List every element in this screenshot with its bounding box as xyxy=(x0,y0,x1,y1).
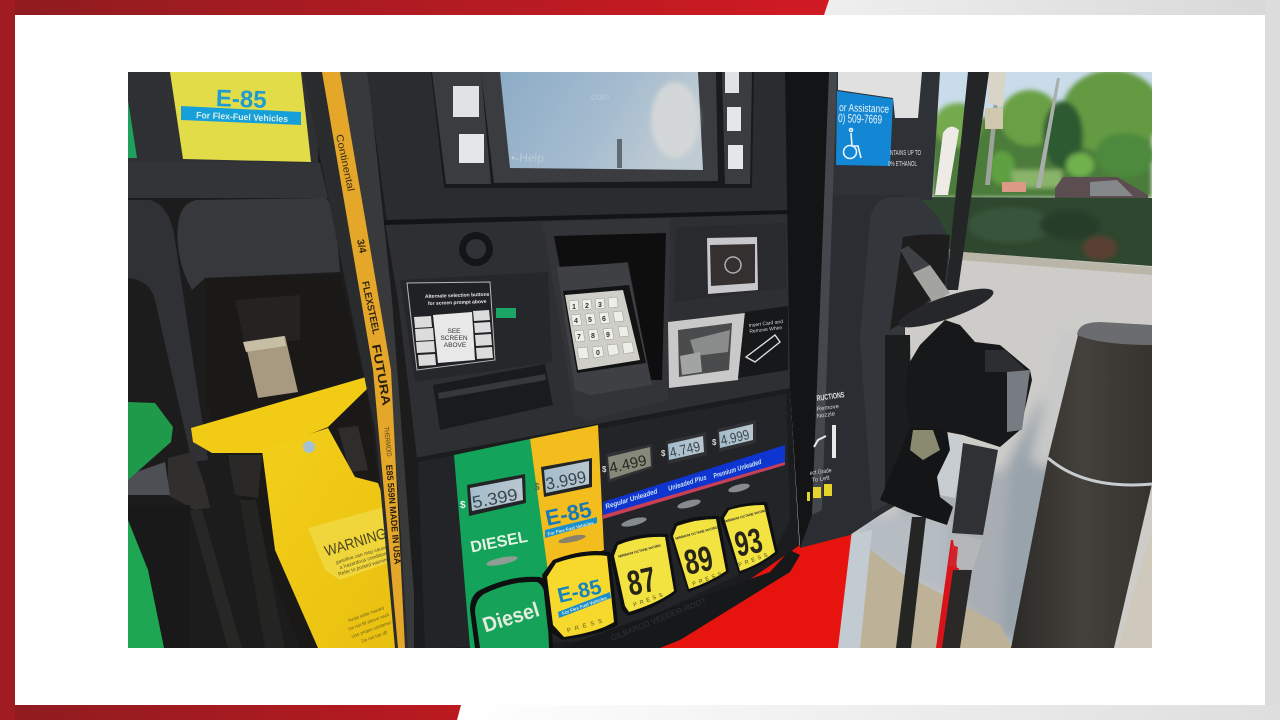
reflected pole xyxy=(617,139,622,168)
premium price: 4.999 xyxy=(719,426,751,448)
alternate selection panel xyxy=(400,272,552,382)
label plate xyxy=(407,282,495,370)
dark divider column xyxy=(785,72,836,548)
sign post xyxy=(985,72,1006,185)
keypad digits: 2 xyxy=(585,303,589,310)
main pump housing xyxy=(303,72,852,648)
faint screen text: coin xyxy=(591,92,609,103)
upper fascia xyxy=(367,72,790,222)
printer slot xyxy=(438,374,546,399)
red ferrule shadow xyxy=(949,545,958,568)
grade band xyxy=(603,445,785,515)
steel spout xyxy=(245,336,298,398)
keypad digits: 9 xyxy=(606,332,610,339)
keypad digits: 0 xyxy=(596,350,600,357)
left mount bracket xyxy=(168,452,210,510)
right selection keys xyxy=(473,310,493,359)
slot highlight xyxy=(690,330,730,356)
sticker pill xyxy=(181,106,301,125)
boot opening xyxy=(205,274,400,648)
e85 indicator xyxy=(558,533,586,545)
keypad digits: 4 xyxy=(574,318,578,325)
diesel button rim xyxy=(470,577,553,648)
left pump body xyxy=(128,72,438,648)
e85 strip label: E-85 xyxy=(543,497,594,531)
recessed panel xyxy=(400,272,552,382)
diesel button label: Diesel xyxy=(480,598,542,637)
89 button rim xyxy=(670,516,729,592)
worn white paper xyxy=(838,72,922,118)
display screen xyxy=(500,72,703,170)
premium lcd xyxy=(719,424,753,448)
diesel strip xyxy=(454,439,549,648)
frame: grey bottom band xyxy=(455,705,1280,720)
warning caption xyxy=(334,544,393,578)
hedge xyxy=(910,197,1152,266)
right nozzle boot xyxy=(178,198,340,290)
price display: premium xyxy=(712,420,756,452)
lip maker text: GILBARCO VEEDER-ROOT xyxy=(609,596,708,643)
keypad digits: 8 xyxy=(591,333,595,340)
e85 currency: $ xyxy=(534,482,540,493)
phone text: 0) 509-7669 xyxy=(838,111,883,127)
diesel currency: $ xyxy=(460,500,466,511)
plus currency: $ xyxy=(661,449,666,458)
middle fascia xyxy=(385,212,792,458)
e85 button face xyxy=(547,555,614,637)
grade label: regular: Regular Unleaded xyxy=(605,488,659,511)
e85 lcd xyxy=(544,461,589,493)
warning heading: WARNING xyxy=(323,525,389,560)
yellow body xyxy=(262,428,403,648)
grade label: plus: Unleaded Plus xyxy=(667,474,708,493)
sticker face xyxy=(836,91,893,166)
plus lcd frame xyxy=(666,432,707,464)
slot plate xyxy=(668,313,745,388)
lower-left dark block xyxy=(186,505,190,507)
wheelchair icon xyxy=(844,128,861,158)
black nozzle xyxy=(880,246,1032,570)
diesel indicator xyxy=(486,554,518,568)
reader window xyxy=(710,244,755,286)
instruction caption: Insert Card and xyxy=(748,319,784,329)
spout dark xyxy=(900,246,930,273)
trigger guard xyxy=(880,427,953,525)
see screen text line 3: ABOVE xyxy=(444,342,467,349)
nozzle text: Nozzle xyxy=(816,411,836,420)
button: 93 xyxy=(720,502,778,574)
diesel strip label: DIESEL xyxy=(469,529,529,556)
nozzle glyph bar xyxy=(832,425,836,458)
e85 button rim xyxy=(542,551,618,640)
tan ground patch xyxy=(860,548,1012,648)
keypad digits: 6 xyxy=(602,316,606,323)
bollard body xyxy=(1011,335,1152,648)
spout ring xyxy=(243,336,286,352)
housing side edge xyxy=(340,72,418,648)
bezel right xyxy=(722,72,752,184)
price display: regular xyxy=(602,444,653,483)
keypad bezel xyxy=(563,285,646,373)
see screen plate xyxy=(433,312,475,363)
upper panel xyxy=(128,72,318,164)
instruction icon xyxy=(746,335,780,362)
e85 button label: E-85 xyxy=(555,575,604,608)
e85 lcd frame xyxy=(541,458,592,497)
bullets line 2: Do not fill above neck xyxy=(348,612,391,631)
keypad digits xyxy=(572,302,610,357)
diesel price: 5.399 xyxy=(471,485,519,512)
regular lcd frame xyxy=(606,444,653,483)
printer body xyxy=(433,364,553,430)
bottom hose left xyxy=(896,517,926,648)
grade label: premium: Premium Unleaded xyxy=(713,459,763,480)
background scene xyxy=(838,70,1162,648)
e85 price: 3.999 xyxy=(544,467,588,494)
price display: diesel xyxy=(460,474,526,516)
reader symbol xyxy=(725,257,741,273)
silver ferrule xyxy=(952,533,982,570)
pavement xyxy=(838,250,1152,648)
plus price: 4.749 xyxy=(668,438,702,460)
right pump column xyxy=(785,72,950,548)
select text: ect Grade xyxy=(809,468,833,477)
upper right panel xyxy=(830,72,940,200)
93 button face xyxy=(724,505,775,571)
keypad digits: 5 xyxy=(588,317,592,324)
warning caption line 1: gasoline use may cause xyxy=(335,544,388,566)
lock inner xyxy=(466,239,486,259)
see screen text: SEE xyxy=(447,328,461,335)
nozzle glyph xyxy=(814,436,826,447)
photo: fuel pump xyxy=(128,70,1162,648)
card instruction panel xyxy=(738,306,788,378)
regular lcd xyxy=(608,447,651,479)
89 label: 89 xyxy=(681,539,716,583)
yellow nozzle xyxy=(191,336,403,648)
vertical rail 1 xyxy=(190,510,242,648)
87 button rim xyxy=(610,534,677,616)
bollard xyxy=(1011,322,1152,648)
frame: red left band xyxy=(0,0,15,720)
keypad hood frame xyxy=(542,218,670,420)
frame: grey right band xyxy=(1265,0,1280,720)
frame: red bottom band xyxy=(0,705,461,720)
yellow guard xyxy=(191,377,370,453)
utility pole xyxy=(1036,78,1060,188)
slot opening xyxy=(678,323,732,377)
button: 89 xyxy=(670,516,729,592)
hose futura text: FUTURA xyxy=(369,343,394,407)
diesel button face xyxy=(475,582,549,648)
pale column xyxy=(838,530,872,648)
splash guard xyxy=(895,281,997,335)
button: e85 xyxy=(542,551,618,640)
label caption: Alternate selection buttons xyxy=(425,292,490,300)
price display: plus xyxy=(661,432,707,464)
87 button face xyxy=(614,537,674,612)
warning panel highlight xyxy=(308,506,396,580)
89 press: PRESS xyxy=(692,570,725,588)
right white button 3 xyxy=(728,145,743,169)
warning bullets xyxy=(345,604,396,646)
distant red sign xyxy=(1002,182,1026,192)
reader plate xyxy=(707,237,758,294)
receipt printer xyxy=(433,364,553,430)
grade indicators xyxy=(621,482,751,529)
bezel outer xyxy=(431,72,754,188)
spout xyxy=(913,265,950,303)
warning caption line 2: a hazardous condition xyxy=(339,551,388,571)
slot lower highlight xyxy=(680,352,702,375)
87 rating text: MINIMUM OCTANE RATING xyxy=(618,543,662,559)
body base xyxy=(128,72,438,648)
black hose above xyxy=(946,72,989,290)
93 label: 93 xyxy=(731,521,766,565)
ethanol notice xyxy=(888,150,921,168)
boot opening xyxy=(890,234,950,330)
hose brand text: Continental xyxy=(333,133,356,192)
keypad keys xyxy=(569,297,634,359)
cap label xyxy=(1007,370,1030,432)
bottom hose right xyxy=(942,570,972,648)
screen bezel xyxy=(431,72,754,188)
89 button face xyxy=(673,519,726,589)
light patch by bracket xyxy=(128,462,170,495)
hood opening xyxy=(554,233,666,380)
bollard cap xyxy=(1077,322,1152,345)
keypad digits: 7 xyxy=(577,334,581,341)
nozzle boot xyxy=(860,197,950,513)
left nozzle boot xyxy=(128,200,208,462)
ethanol notice text line 2: 0% ETHANOL xyxy=(888,161,917,168)
ground reflections xyxy=(858,399,1050,646)
frame: grey top band xyxy=(820,0,1280,15)
yellow fuel hose xyxy=(322,72,405,648)
left white button 1 xyxy=(453,86,479,117)
hose e85 text: E85 559N MADE IN USA xyxy=(384,464,403,565)
lower bezel lip xyxy=(560,550,800,648)
dark hose behind yellow hose xyxy=(303,72,410,648)
horizontal beam xyxy=(128,161,328,198)
reader recess xyxy=(674,223,786,302)
green tag xyxy=(496,308,516,318)
warning caption line 3: Refer to posted warnings xyxy=(338,556,393,578)
bezel left xyxy=(432,72,491,184)
e85 pill text: For Flex Fuel Vehicles xyxy=(547,520,595,537)
keypad surround xyxy=(557,263,652,395)
sticker pill text: For Flex-Fuel Vehicles xyxy=(196,110,288,124)
help text: •-Help xyxy=(511,151,544,165)
panel edge highlight xyxy=(812,72,837,515)
see screen text line 2: SCREEN xyxy=(440,335,468,342)
e85 button press: PRESS xyxy=(567,618,607,634)
card slot xyxy=(668,313,745,388)
bullets line 4: Do not top off xyxy=(361,630,388,644)
bolt xyxy=(303,441,315,453)
label caption line 2: for screen prompt above xyxy=(428,299,487,307)
remove text: Remove xyxy=(816,404,840,413)
green nozzle body xyxy=(128,520,164,648)
button: diesel xyxy=(470,577,553,648)
trees xyxy=(932,70,1162,198)
cloud reflection xyxy=(651,82,699,158)
curb xyxy=(960,252,1152,275)
hose thermoid text: THERMOID xyxy=(382,426,392,457)
green nozzle guard xyxy=(128,402,173,480)
right mount bracket xyxy=(338,426,368,472)
instruction heading: RUCTIONS xyxy=(816,390,845,403)
roadside sign xyxy=(935,127,959,195)
vertical rail 2 xyxy=(243,500,269,568)
key lock xyxy=(459,232,493,266)
93 button rim xyxy=(720,502,778,574)
ethanol notice text: NTAINS UP TO xyxy=(890,150,921,157)
e85 strip xyxy=(530,425,604,572)
keypad digits: 3 xyxy=(598,302,602,309)
pale tan right strip xyxy=(1118,530,1152,648)
grade band stripe xyxy=(603,462,785,519)
trigger light gap xyxy=(937,433,963,498)
frame: red top band xyxy=(0,0,829,705)
contactless reader xyxy=(674,223,786,302)
price panel xyxy=(418,394,790,648)
left white button 2 xyxy=(459,134,484,163)
sky xyxy=(937,72,1152,120)
left selection keys xyxy=(414,316,436,366)
nozzle cap highlight xyxy=(985,350,1028,372)
green sticker sliver xyxy=(128,100,137,158)
blue assistance sticker xyxy=(836,91,893,166)
plus lcd xyxy=(668,436,704,460)
lower bracket block xyxy=(885,335,912,505)
centre mount bracket xyxy=(228,455,262,498)
bollard band xyxy=(1048,458,1152,485)
sticker heading: E-85 xyxy=(215,85,267,114)
diesel lcd xyxy=(470,478,523,511)
89 rating text: MINIMUM OCTANE RATING xyxy=(675,525,719,541)
opening texture xyxy=(235,295,300,345)
nozzle barrel xyxy=(952,443,998,535)
93 rating text: MINIMUM OCTANE RATING xyxy=(724,508,768,524)
silver clip xyxy=(910,430,940,460)
lock outer xyxy=(459,232,493,266)
instruction panel body xyxy=(738,306,788,378)
bullets line 1: Avoid static hazard xyxy=(347,605,385,623)
hose size text: 3/4 xyxy=(354,238,368,255)
lower bezel xyxy=(414,388,800,648)
yellow mini buttons xyxy=(807,484,832,501)
e85 strip pill xyxy=(545,517,597,538)
bullets line 3: Use proper container xyxy=(351,620,393,639)
regular price: 4.499 xyxy=(608,452,648,477)
keypad assembly xyxy=(542,218,670,420)
nozzle head xyxy=(905,320,1032,447)
lower right panel xyxy=(800,195,905,548)
fascia shadow line xyxy=(384,210,790,225)
instruction caption line 2: Remove When xyxy=(749,325,783,335)
bezel centre xyxy=(481,72,718,183)
car windows xyxy=(1090,180,1133,196)
87 press: PRESS xyxy=(633,591,666,609)
to-left text: To Left xyxy=(811,475,830,484)
car xyxy=(1055,177,1148,198)
87 label: 87 xyxy=(624,560,659,604)
keypad face xyxy=(565,290,640,370)
assistance text: or Assistance xyxy=(839,102,889,116)
right white button 1 xyxy=(725,72,739,93)
e85 button pill xyxy=(558,592,611,618)
e85 button pill text: For Flex Fuel Vehicles xyxy=(561,595,608,616)
93 press: PRESS xyxy=(738,551,771,569)
E-85 sticker xyxy=(170,72,311,162)
diesel lcd frame xyxy=(467,474,526,516)
price display: e85 xyxy=(534,458,592,497)
regular currency: $ xyxy=(602,465,607,474)
premium lcd frame xyxy=(717,420,756,452)
button: 87 xyxy=(610,534,677,616)
red pump base xyxy=(650,530,852,648)
right white button 2 xyxy=(727,107,741,131)
keypad digits: 1 xyxy=(572,304,576,311)
premium currency: $ xyxy=(712,438,717,447)
red hose sleeve xyxy=(936,540,963,648)
instruction strip xyxy=(807,390,845,501)
hose flexsteel text: FLEXSTEEL xyxy=(359,280,381,335)
